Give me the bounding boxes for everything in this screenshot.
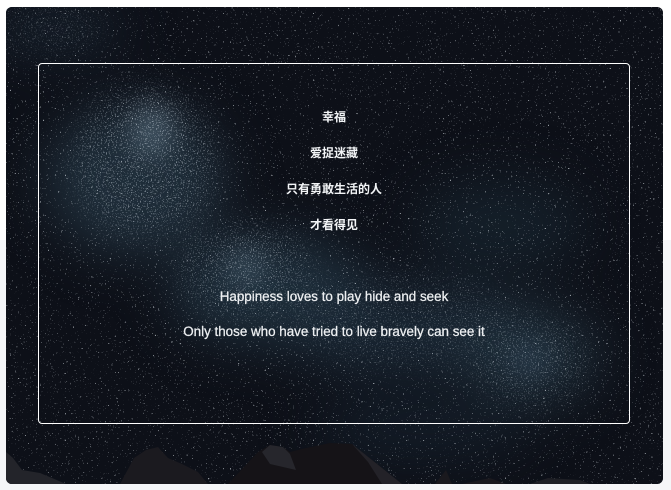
text: 才看得见: 才看得见: [310, 218, 358, 232]
text: english line two: Only those who have tried to live bravely can see it: [183, 324, 485, 339]
rocky mountains: [6, 443, 590, 484]
text: 爱捉迷藏: 爱捉迷藏: [310, 146, 358, 160]
white frame: [38, 63, 630, 424]
text: 幸福: 幸福: [322, 110, 346, 124]
text: 只有勇敢生活的人: 只有勇敢生活的人: [286, 182, 382, 196]
text: english line one: Happiness loves to play hide and seek: [220, 289, 448, 304]
